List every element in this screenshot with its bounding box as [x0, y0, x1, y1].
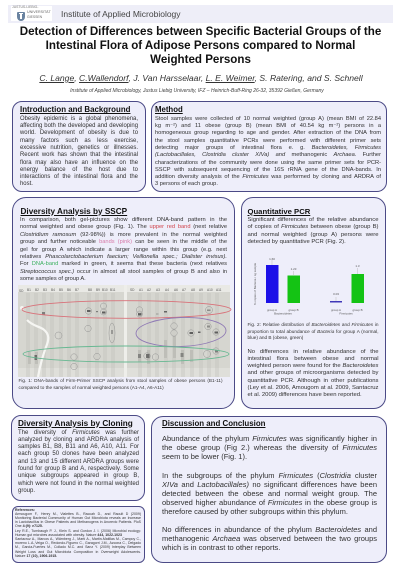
value labels: 1.60 [269, 257, 275, 261]
text: references: Santacruz A., Marcos A., Wärnberg J., Martí A., Martin-Matillas M., Campoy C., [15, 537, 141, 541]
heading: method: Method [155, 105, 183, 114]
authors: C. Lange, C.Wallendorf, J. Van Harsselaar, L. E. Weimer, S. Ratering, and S. Schnell [39, 73, 363, 83]
lane labels: A8 [191, 288, 195, 292]
text: SSCP: group and further noticeable bands (pink) can be seen in the middle of the [20, 239, 227, 245]
panel: diversity analysis by cloning [11, 415, 145, 501]
text: discussion paragraph 2: observed higher abundance of Firmicutes in the obese group is [162, 498, 377, 507]
text: no differences: No differences in relative abundance of the [248, 348, 378, 354]
text: SSCP: gel for group A which indicate a larger range within this group (e.g. next [20, 247, 227, 253]
lane labels: B3 [43, 288, 47, 292]
text: method: addition diversity analysis of the Firmicutes was performed by cloning and ARDRA of [155, 174, 381, 180]
lane labels: A1 [139, 288, 143, 292]
text: discussion paragraph 1 [162, 434, 377, 461]
text: method: (Lactobacillales, Clostridia cluster XIVa) and methanogenic Archaea. Further [155, 152, 381, 158]
text: method: characterizations of the community were done using the same primer sets for PCR- [155, 160, 381, 166]
value labels: 1.3 [355, 264, 360, 268]
title: Weighted Persons [150, 54, 251, 66]
axis labels: group A [331, 308, 341, 312]
text: discussion paragraph 3: which is in contrast to other reports. [162, 543, 280, 552]
purple ellipse [136, 316, 226, 348]
heading: cloning: Diversity Analysis by Cloning [18, 418, 133, 428]
text: quantitative PCR: of copies of Firmicutes between obese (group B) [248, 224, 378, 230]
text: discussion paragraph 2: therefore caused by other subgroups within this phylum. [162, 507, 348, 516]
text: quantitative PCR: detected by quantitative PCR (Fig. 2). [248, 239, 346, 245]
text: discussion paragraph 2: In the subgroups of the phylum Firmicutes (Clostridia cluster [162, 470, 377, 480]
text: discussion paragraph 2: XIVa and Lactobacillales) no significant differences have been [162, 480, 377, 489]
text: discussion paragraph 2 [162, 470, 377, 516]
lane labels: A2 [147, 288, 151, 292]
text: cloning: each group 50 clones have been analyzed [18, 451, 139, 457]
text: introduction [20, 116, 138, 187]
text: discussion paragraph 1: Abundance of the phylum Firmicutes was significantly higher in [162, 434, 377, 442]
lane labels [19, 288, 222, 293]
text: quantitative PCR [248, 217, 378, 245]
text: cloning: group. [18, 488, 35, 494]
text: references: Weight Loss and Gut Microbiota Composition in Overweight Adolescents. [15, 550, 141, 554]
text: discussion paragraph 3: No differences in abundance of the phylum Bacteroidetes and [162, 525, 377, 534]
text: method: SSCP with subsequent sequencing of the 16S rRNA gene of the DNA-bands. In [155, 167, 381, 173]
heading: quantitative PCR: Quantitative PCR [248, 206, 310, 216]
text: method [155, 116, 381, 187]
text: introduction: host. [20, 181, 33, 187]
axis labels [253, 263, 363, 316]
circled bands [55, 303, 219, 370]
caption: figure 2: blue) and B (obese, green) [248, 335, 303, 340]
text: cloning: unique subgroups appeared in group B, [18, 473, 139, 479]
lane labels: B4 [51, 288, 55, 292]
text: introduction: many factors such as less exercise, [20, 138, 138, 144]
text: references: moreno L.A.,Veiga O., Redondo-Figuero C., Garagorri J.M., Azcona C., Delgado [15, 541, 141, 545]
text: SSCP: In comparison, both gel-pictures show different DNA-band pattern in the [20, 217, 227, 223]
lane labels: A4 [165, 288, 169, 292]
text: SSCP: For DNA-band marked in green, it seems that these bacteria (next relatives [20, 261, 227, 267]
title [20, 26, 381, 66]
lane labels: A11 [216, 288, 222, 292]
axis labels: Bacteroidetes [274, 312, 292, 316]
text: method: 3 persons of each group. [155, 181, 218, 187]
lane labels: A10 [207, 288, 213, 292]
green ellipse [23, 346, 229, 362]
value labels [269, 257, 360, 296]
title: Detection of Differences between Specific Bacterial Groups of the [20, 26, 381, 38]
text: references: in Lactobacillus in Obese Patients and Methanogens in Anorexic Patients. PloS [15, 520, 141, 524]
text: discussion paragraph 3: methanogenic Archaea was observed between the two groups [162, 534, 377, 543]
axis labels: group B [352, 308, 363, 312]
university logo: GIESSEN [27, 14, 42, 18]
lane labels: B1 [27, 288, 31, 292]
error bars [272, 260, 358, 301]
text: SSCP: Streptococcus spec.) occur in almost all stool samples of group B and also in [20, 269, 227, 275]
text: introduction: affecting both the developed and developing [20, 123, 138, 129]
axis labels: group B [288, 308, 299, 312]
panel: diversity analysis by SSCP [12, 197, 235, 409]
text: introduction: interactions of the intestinal flora and the [20, 174, 138, 180]
title: Intestinal Flora of Adipose Persons compared to Normal [46, 40, 355, 52]
text: method: kg m⁻²) and 11 obese (group B) (mean BMI of 40.54 kg m⁻²) persons in a [155, 123, 381, 129]
text: introduction: Recent work has shown that the intestinal [20, 152, 138, 158]
text: method: the stool samples quantitative PCRs were performed with different primer sets [155, 138, 381, 144]
caption: figure 2: Fig. 2: Relative distribution of Bacteroidetes and Firmicutes in [248, 322, 379, 327]
lane labels: B7 [75, 288, 79, 292]
text: no differences: intestinal flora between obese and normal [248, 356, 378, 362]
red ellipse [22, 301, 231, 318]
heading: discussion: Discussion and Conclusion [162, 418, 265, 428]
axis labels: Firmicutes [339, 312, 353, 316]
value labels: 0.03 [333, 292, 339, 296]
lane labels: SD [19, 289, 24, 293]
text: references: Ley R.E., Turnbaugh P. J., Klein S. and Gordon J. I. (2006) Microbial ecology: [15, 529, 141, 533]
text: SSCP: relatives Phascolarctobacterium faecium; Veillonella spec.; Dialister invisus). [20, 254, 227, 260]
text: discussion paragraph 1: seem to be lower (Fig. 1). [162, 452, 247, 461]
caption: figure 2: proportion to total abundance of Bacteria for group A (normal, [248, 328, 378, 334]
vertical smears [28, 336, 193, 364]
lane labels: A3 [156, 288, 160, 292]
text: introduction: energy balance of the host due to [20, 167, 138, 173]
panel: references [12, 506, 145, 563]
heading: introduction: Introduction and Background [20, 105, 130, 114]
caption: figure 1: compared to the samples of normal weighted persons (A1-A4, A6-A11) [18, 385, 164, 390]
lane labels: A6 [174, 288, 178, 292]
text: no differences: weighted person were found for the Bacteroidetes [248, 363, 378, 369]
text: no differences: and other groups of microorganisms detected by [248, 370, 378, 376]
text: introduction: flora may also have an influence on the [20, 160, 138, 166]
text: references: Armougom F., Henry M., Vialettes B., Raccah D., and Raoult D (2009) [15, 512, 141, 516]
university logo: UNIVERSITÄT [27, 10, 51, 14]
text: SSCP: normal weighted and obese group (Fig. 1). The upper red band (next relative [20, 224, 227, 230]
text: cloning: found for group B and A, respectively. Some [18, 466, 139, 472]
panel: introduction and background [12, 101, 146, 192]
text: cloning: The diversity of Firmicutes was further [18, 430, 139, 436]
dark DNA bands [34, 310, 218, 360]
lane labels: B8 [88, 288, 92, 292]
text: discussion paragraph 2: detected between the obese and normal weight group. The [162, 489, 377, 498]
text: references: References: [15, 508, 35, 512]
panel: method [151, 101, 387, 192]
text: SSCP: some samples of group A. [20, 276, 86, 282]
text: cloning: samples B1, B8, B11 and A6, A10, A11. For [18, 444, 139, 450]
lane labels: B11 [110, 288, 116, 292]
text: method: homogeneous group regarding to age and gender. After extraction of the DNA from [155, 130, 381, 136]
heading: SSCP: Diversity Analysis by SSCP [20, 206, 127, 216]
text: introduction: world. Development of obesity is due to [20, 130, 138, 136]
lane labels: B6 [67, 288, 71, 292]
panel: discussion and conclusion [151, 416, 386, 562]
text: SSCP: Clostridium ramosum (92-98%)) is more prevalent in the normal weighted [20, 232, 227, 238]
axis labels: % copies of Bacteria / ng sample [253, 263, 257, 305]
axis labels: group A [267, 308, 277, 312]
caption: figure 1 [18, 378, 222, 390]
text: cloning: which were not found in the normal weighted [18, 481, 139, 487]
text: references: Human gut microbes associated with obesity. Nature 444, 1022-1023 [15, 533, 122, 537]
lane labels: A7 [182, 288, 186, 292]
text: cloning: analyzed by cloning and ARDRA analysis of [18, 437, 139, 443]
text: cloning: and 13 and 15 different ARDRA groups were [18, 459, 139, 465]
lane labels: B9 [96, 288, 100, 292]
text: introduction: Obesity epidemic is a global phenomena, [20, 116, 138, 122]
text: cloning [18, 430, 140, 494]
text: references: M., Garcia-Fuertes M., Collado M.C. and Sanz Y. (2009) Interplay Between [15, 545, 141, 549]
text: quantitative PCR: Significant differences of the relative abundance [248, 217, 378, 223]
lane labels: B10 [102, 288, 108, 292]
text: method: Stool samples were collected of 10 normal weighted (group A) (mean BMI of 22.84 [155, 116, 381, 122]
text: quantitative PCR: and normal weighted (group A) persons were [248, 232, 378, 238]
text: introduction: excessive nutrition, genetics or illnesses. [20, 145, 138, 151]
university logo: JUSTUS-LIEBIG- [12, 5, 38, 9]
lane labels: B2 [35, 288, 39, 292]
text: no differences: quantitative PCR. Although in other publications [248, 378, 378, 384]
lane labels: SD [130, 288, 135, 292]
text: references: One 4:(9): e7125. [15, 524, 43, 528]
caption: figure 1: Fig. 1: DNA-bands of Firm-Primer SSCP analysis from stool samples of obese persons (B1-11) [18, 378, 222, 383]
gel image with marked DNA bands [18, 285, 232, 377]
text: references: Nature 17 (10), 1906-1915. [15, 554, 57, 558]
text: references: Monitoring Bacterial Community of Human Gut Microbiota reveals an Increase [15, 516, 141, 520]
text: no differences [248, 348, 378, 398]
panel: quantitative PCR [241, 197, 386, 409]
text: references [15, 508, 141, 558]
bars [266, 265, 364, 303]
lane labels: A9 [199, 288, 203, 292]
bar chart: relative distribution [253, 257, 364, 316]
lane labels: B5 [59, 288, 63, 292]
institute name: Institute of Applied Microbiology [61, 8, 181, 18]
text: no differences: et al. 2009) differences have been reported. [248, 392, 362, 398]
text: no differences: (Ley et al. 2006, Amougom at al. 2009, Santacruz [248, 385, 378, 391]
text: discussion paragraph 1: the obese group (Fig 2.) whereas the diversity of Firmicutes [162, 443, 377, 452]
university logo [11, 6, 52, 21]
caption: figure 2 [248, 322, 379, 340]
affiliation: Institute of Applied Microbiology, Justus Liebig University, IFZ – Heinrich-Buff-Ring 26-32, 35392 Gießen, Germany [70, 88, 324, 94]
text: discussion paragraph 3 [162, 525, 377, 552]
text: SSCP [20, 217, 227, 282]
value labels: 1.23 [291, 267, 297, 271]
text: method: detecting major groups of intestinal flora e. g. Bacteroidetes, Firmicutes [155, 145, 381, 151]
header band [8, 5, 393, 23]
